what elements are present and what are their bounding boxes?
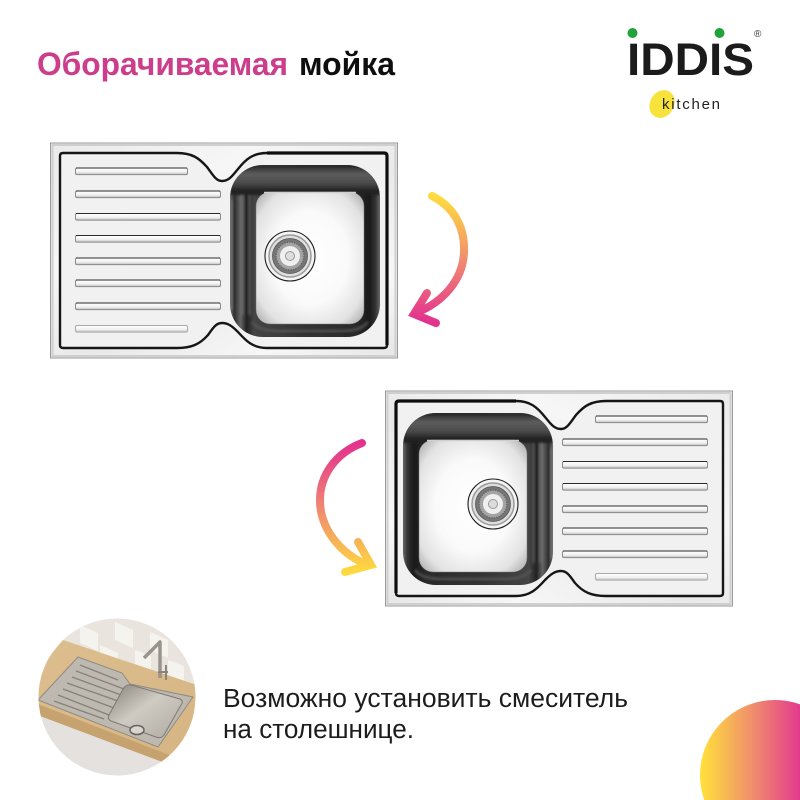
description line 1: Возможно установить смеситель [223, 685, 628, 713]
title: black word: мойка [299, 46, 395, 82]
base cabinets [41, 716, 162, 776]
photo: sink installed on worktop [38, 618, 196, 776]
wall tile pattern [80, 622, 184, 684]
steel bowl [108, 685, 182, 738]
registered mark: ® [754, 29, 762, 40]
description line 2: на столешнице. [223, 716, 414, 744]
worktop front edge [38, 704, 170, 762]
worktop [38, 640, 196, 756]
sink: bottom, mirrored with drainer right [386, 391, 732, 606]
logo green dot left [628, 28, 638, 38]
arrow: bottom, counter-clockwise [320, 443, 371, 572]
logo: IDDIS kitchen [627, 28, 762, 123]
gradient circle: bottom right corner [700, 700, 800, 800]
logo green dot right [714, 28, 724, 38]
drainer grooves [54, 665, 124, 719]
faucet handle [158, 665, 168, 680]
title [37, 46, 395, 82]
drain [130, 726, 144, 734]
faucet [144, 642, 160, 678]
description text [223, 685, 628, 744]
tiled wall [38, 618, 196, 698]
sink: top, drainer left [50, 143, 398, 358]
title: pink word: Оборачиваемая [37, 46, 288, 82]
kitchen label: kitchen [662, 96, 720, 113]
arrow: top, clockwise [414, 196, 464, 323]
logo wordmark: IDDIS [627, 34, 754, 85]
yellow blob [644, 85, 680, 123]
steel drainer plate [38, 657, 193, 747]
